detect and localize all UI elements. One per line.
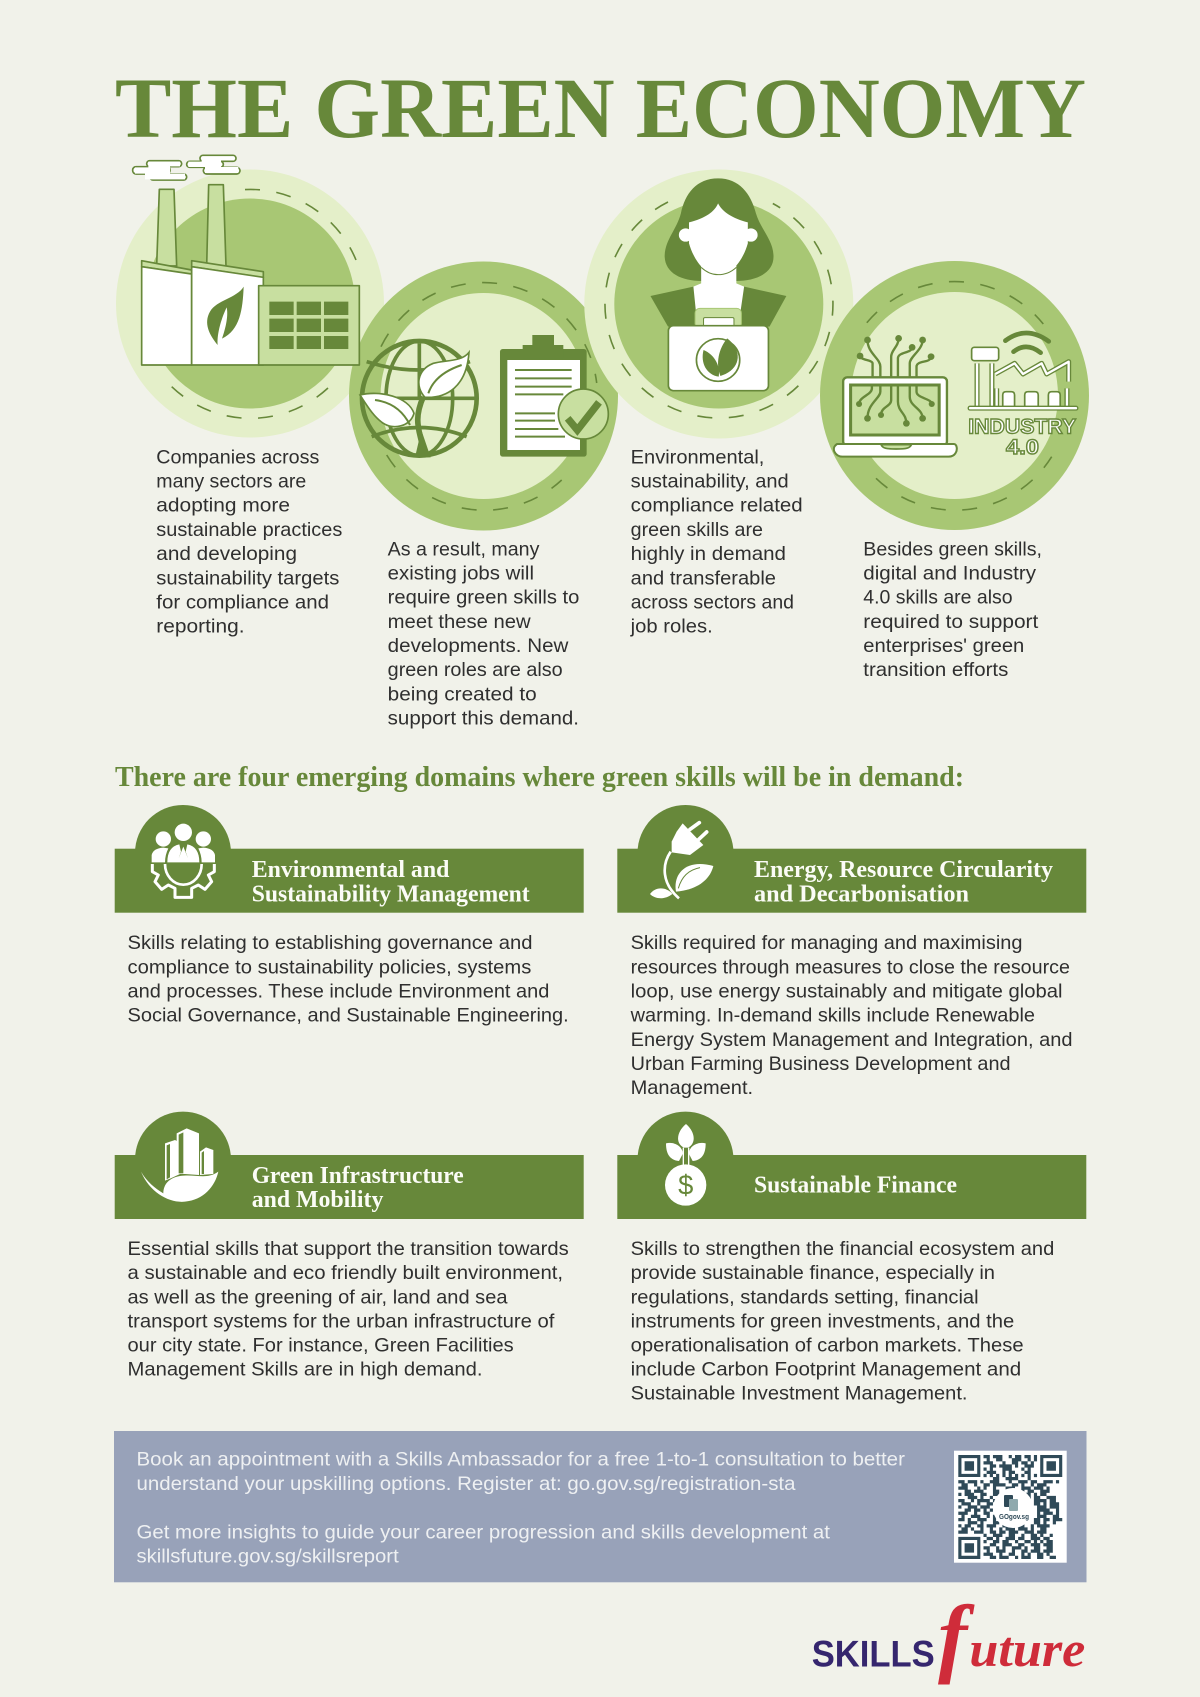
text block: sustainable finance: operationalisation of carbon markets. These — [631, 1335, 1024, 1357]
text block: energy and decarbonisation: Skills required for managing and maximising — [631, 932, 1022, 954]
text block: green infrastructure: Essential skills that support the transition towards — [128, 1238, 569, 1260]
panel: sustainable finance header — [617, 1112, 1086, 1219]
text block: existing jobs: existing jobs will — [388, 563, 534, 585]
text block: green skills in demand: across sectors and — [631, 591, 794, 613]
panel: energy, resource circularity header — [617, 805, 1086, 913]
text block: energy and decarbonisation: Management. — [631, 1077, 753, 1099]
panel: call to action: Book an appointment with a Skills Ambassador for a free 1-to-1 consultation to better — [136, 1449, 905, 1471]
text block: environmental and sustainability management: and processes. These include Environment and — [128, 980, 549, 1002]
text block: companies: sustainable practices — [156, 519, 343, 541]
text block: green infrastructure: our city state. For instance, Green Facilities — [128, 1335, 514, 1357]
QR code: GOgov.sg — [999, 1512, 1029, 1521]
text block: energy and decarbonisation: resources through measures to close the resource — [631, 956, 1070, 978]
text block: green infrastructure: transport systems for the urban infrastructure of — [128, 1310, 555, 1332]
text block: existing jobs — [388, 538, 580, 730]
text block: existing jobs: support this demand. — [388, 708, 579, 730]
text block: existing jobs: As a result, many — [388, 538, 540, 560]
text block: companies: adopting more — [156, 495, 290, 517]
text block: companies: sustainability targets — [156, 567, 340, 589]
text block: green skills in demand: compliance related — [631, 495, 803, 517]
panel: environmental and sustainability management header: Sustainability Management — [252, 881, 530, 907]
text block: green infrastructure — [128, 1238, 569, 1381]
panel: call to action: understand your upskilling options. Register at: go.gov.sg/registration-sta — [136, 1473, 796, 1495]
icon: laptop with circuit lines — [834, 335, 957, 457]
circle 2 background — [349, 262, 618, 530]
title: THE GREEN ECONOMY — [115, 60, 1086, 156]
panel: green infrastructure header: Green Infrastructure — [252, 1163, 464, 1189]
circle 3 background — [584, 170, 853, 438]
text block: green skills in demand — [630, 446, 803, 638]
text block: environmental and sustainability management: Social Governance, and Sustainable Engineering. — [128, 1005, 569, 1027]
icon label: industry 4.0: INDUSTRY — [968, 414, 1077, 438]
text block: green infrastructure: as well as the greening of air, land and sea — [128, 1286, 508, 1308]
circle 4 background — [820, 261, 1089, 530]
text block: green skills in demand: Environmental, — [631, 446, 764, 468]
icon: industry 4.0 factory with wifi — [968, 333, 1078, 410]
text block: digital and industry 4.0: digital and Industry — [863, 563, 1036, 585]
text block: digital and industry 4.0: Besides green skills, — [863, 538, 1042, 560]
text block: energy and decarbonisation: Energy System Management and Integration, and — [631, 1029, 1072, 1051]
text block: existing jobs: meet these new — [388, 611, 532, 633]
text block: energy and decarbonisation — [630, 932, 1072, 1099]
icon: coin with sprout: $ — [678, 1170, 693, 1201]
panel: energy, resource circularity header: and Decarbonisation — [754, 881, 969, 907]
text block: sustainable finance: Sustainable Investment Management. — [631, 1383, 968, 1405]
icon: factory with leaf and smoke — [133, 155, 359, 365]
text block: digital and industry 4.0: required to support — [863, 611, 1039, 633]
text block: green skills in demand: green skills are — [631, 519, 763, 541]
text block: green infrastructure: a sustainable and eco friendly built environment, — [128, 1262, 563, 1284]
text block: environmental and sustainability management: Skills relating to establishing governance and — [128, 932, 532, 954]
text block: existing jobs: require green skills to — [388, 587, 580, 609]
text block: sustainable finance: instruments for green investments, and the — [631, 1310, 1014, 1332]
panel: environmental and sustainability management header: Environmental and — [252, 857, 450, 883]
text block: companies: many sectors are — [156, 471, 306, 493]
text block: environmental and sustainability management — [128, 932, 569, 1027]
icon: people and gear — [152, 824, 215, 897]
text block: companies: Companies across — [156, 446, 320, 468]
text block: digital and industry 4.0: transition efforts — [863, 659, 1009, 681]
icon: coin with sprout — [665, 1124, 706, 1206]
text block: companies: and developing — [156, 543, 297, 565]
panel: call to action: Get more insights to guide your career progression and skills development at — [136, 1521, 831, 1543]
panel: sustainable finance header: Sustainable Finance — [754, 1172, 957, 1198]
icon: city buildings on leaf — [141, 1128, 218, 1202]
section heading: There are four emerging domains where green skills will be in demand: — [115, 762, 964, 793]
text block: energy and decarbonisation: Urban Farming Business Development and — [631, 1053, 1011, 1075]
panel: energy, resource circularity header: Energy, Resource Circularity — [754, 857, 1053, 883]
panel: call to action: skillsfuture.gov.sg/skillsreport — [136, 1546, 399, 1568]
text block: green skills in demand: and transferable — [631, 567, 776, 589]
text block: digital and industry 4.0 — [863, 538, 1042, 681]
text block: sustainable finance: Skills to strengthen the financial ecosystem and — [631, 1238, 1054, 1260]
text block: sustainable finance: include Carbon Footprint Management and — [631, 1359, 1021, 1381]
text block: companies: reporting. — [156, 616, 245, 638]
logo: SkillsFuture — [812, 1589, 1085, 1686]
text block: companies: for compliance and — [156, 591, 329, 613]
text block: sustainable finance: regulations, standards setting, financial — [631, 1286, 979, 1308]
text block: sustainable finance — [631, 1238, 1054, 1405]
icon: clipboard with check — [500, 335, 608, 457]
text block: existing jobs: green roles are also — [388, 659, 563, 681]
icon: globe with plant — [360, 341, 477, 457]
text block: green skills in demand: highly in demand — [631, 543, 786, 565]
text block: sustainable finance: provide sustainable finance, especially in — [631, 1262, 995, 1284]
icon: plug with leaf — [650, 823, 713, 898]
text block: companies — [156, 446, 343, 638]
text block: green skills in demand: job roles. — [630, 616, 713, 638]
icon label: industry 4.0: 4.0 — [1006, 434, 1039, 459]
QR code — [954, 1451, 1067, 1563]
circle 1 background — [116, 170, 384, 438]
text block: existing jobs: being created to — [388, 683, 537, 705]
icon: woman with green briefcase — [650, 178, 786, 391]
text block: energy and decarbonisation: warming. In-demand skills include Renewable — [630, 1005, 1035, 1027]
text block: environmental and sustainability management: compliance to sustainability policies, systems — [128, 956, 532, 978]
panel: green infrastructure header — [115, 1112, 584, 1219]
text block: digital and industry 4.0: enterprises' green — [863, 635, 1024, 657]
panel: call to action — [114, 1431, 1086, 1582]
logo: SkillsFuture: SKILLS — [812, 1634, 935, 1675]
text block: green infrastructure: Management Skills are in high demand. — [128, 1359, 482, 1381]
text block: existing jobs: developments. New — [388, 635, 569, 657]
text block: green skills in demand: sustainability, and — [631, 471, 789, 493]
text block: digital and industry 4.0: 4.0 skills are also — [863, 587, 1013, 609]
panel: green infrastructure header: and Mobility — [252, 1187, 383, 1213]
logo: SkillsFuture: future — [938, 1589, 1085, 1686]
panel: environmental and sustainability management header — [115, 805, 584, 913]
icon label: industry 4.0 — [968, 414, 1077, 459]
text block: energy and decarbonisation: loop, use energy sustainably and mitigate global — [631, 980, 1062, 1002]
